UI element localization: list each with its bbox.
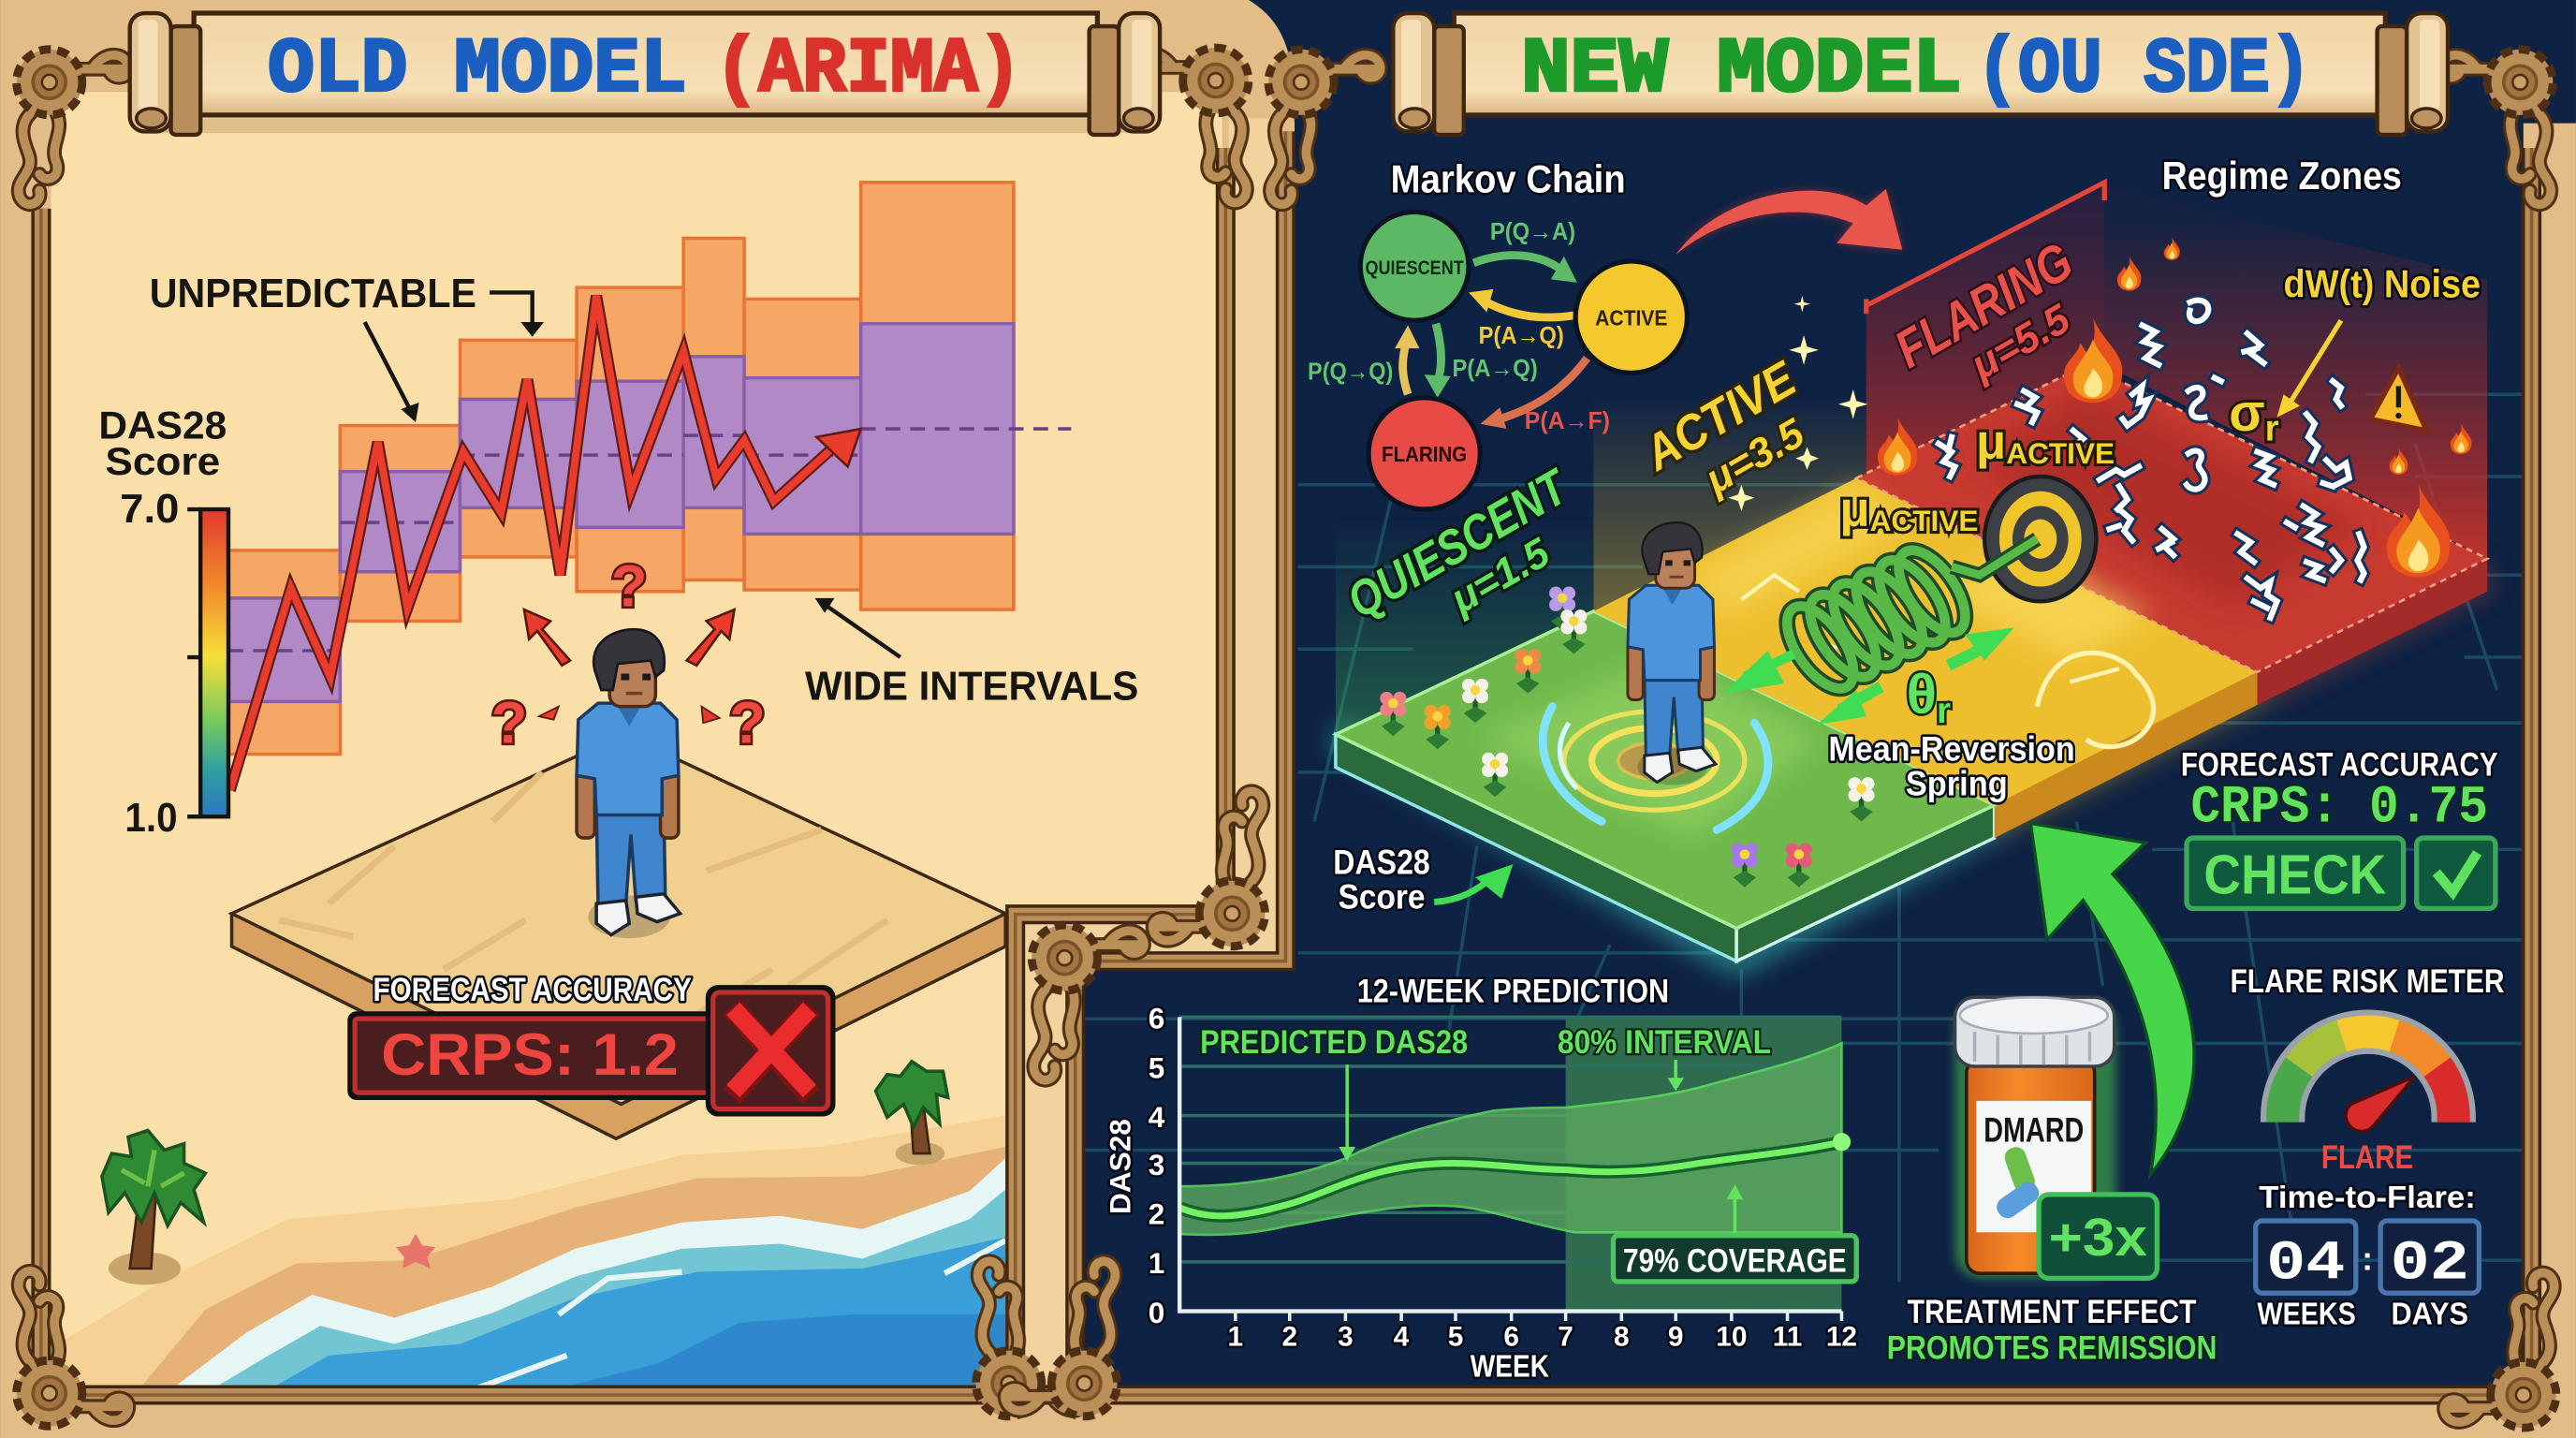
x axis labels	[1228, 1312, 1857, 1352]
label: mean-reversion spring: Spring	[1906, 764, 2008, 802]
callout: 79% coverage: 79% COVERAGE	[1623, 1242, 1847, 1279]
y axis title: DAS28	[1104, 1119, 1137, 1214]
countdown: days	[2380, 1221, 2479, 1332]
target: active mean	[1984, 477, 2096, 601]
title text	[268, 26, 1022, 114]
x axis labels: 9	[1668, 1321, 1683, 1352]
x axis title: WEEK	[1471, 1350, 1549, 1385]
x axis labels: 6	[1503, 1321, 1519, 1352]
board glow	[1336, 575, 2487, 961]
board side faces	[1336, 559, 2487, 961]
isometric regime board	[1336, 183, 2487, 961]
question marks and red arrows: ?	[611, 554, 648, 620]
zone label: flaring: FLARING	[1885, 231, 2083, 379]
colour scale bar: 7.0	[120, 486, 179, 532]
channel between the two frames	[1018, 118, 1281, 1393]
x axis labels: 2	[1281, 1321, 1297, 1352]
y axis labels: 5	[1149, 1050, 1164, 1084]
labels: mu active: ACTIVE	[2006, 436, 2115, 470]
meter heading: FLARE RISK METER	[2231, 963, 2505, 1000]
zone label: flaring	[1885, 231, 2104, 418]
label: time to flare: Time-to-Flare:	[2259, 1181, 2476, 1215]
deep water	[271, 1238, 1005, 1388]
label: predicted DAS28	[1200, 1024, 1468, 1162]
label: DAS28 Score axis: Score	[105, 439, 220, 483]
zone: active	[1593, 478, 2257, 805]
zone glows	[1479, 386, 2365, 838]
CRPS value box: CRPS: 1.2	[381, 1022, 679, 1088]
title text: (OU SDE)	[1976, 26, 2311, 114]
x axis labels: 3	[1338, 1321, 1354, 1352]
x axis labels: 4	[1394, 1321, 1410, 1352]
label: treatment effect: TREATMENT EFFECT	[1908, 1294, 2197, 1330]
zone walls	[1336, 183, 2487, 734]
label: predicted DAS28: PREDICTED DAS28	[1200, 1024, 1468, 1061]
bottle glow	[1955, 1003, 2116, 1278]
diagram: Markov chain	[1308, 156, 1687, 509]
label: sigma r and noise arrow	[2229, 320, 2341, 448]
wet sand bands	[52, 1116, 1005, 1388]
flames	[1878, 237, 2471, 577]
sand platform	[232, 734, 1005, 1138]
perspective grid	[1084, 394, 2524, 1282]
y axis labels	[1149, 1002, 1165, 1329]
forecast shaded region	[1566, 1017, 1841, 1312]
x axis labels: 8	[1614, 1321, 1630, 1352]
banner: new model title	[1393, 13, 2448, 135]
zone label: flaring: μ=5.5	[1962, 296, 2078, 389]
red arrow from chain to regime zones	[1676, 189, 1902, 255]
y axis labels: 0	[1149, 1296, 1164, 1329]
question marks and red arrows: ?	[729, 690, 766, 756]
state: flaring: FLARING	[1382, 442, 1467, 466]
transition labels	[1308, 217, 1610, 434]
x axis labels: 1	[1228, 1321, 1243, 1352]
outer orange interval bars	[228, 183, 1014, 755]
transition labels: P(A→F)	[1525, 406, 1610, 434]
predicted DAS28 line	[1179, 1133, 1851, 1216]
transition labels: P(A→Q)	[1453, 354, 1538, 382]
countdown: weeks	[2256, 1221, 2356, 1332]
label: unpredictable with arrows	[150, 271, 544, 422]
state: flaring	[1368, 398, 1480, 509]
transition labels: P(Q→Q)	[1308, 357, 1393, 385]
callout: CRPS 0.75 forecast accuracy: FORECAST ACCURACY	[2181, 746, 2498, 783]
theta arrows: r	[1937, 691, 1951, 731]
flare risk meter	[2231, 963, 2505, 1332]
x axis labels: 11	[1773, 1321, 1802, 1352]
transition arrows	[1403, 256, 1587, 420]
zone label: quiescent: μ=1.5	[1442, 530, 1558, 623]
zone label: active	[1633, 350, 1830, 523]
dashed median lines	[228, 429, 1071, 651]
label: wide intervals with arrow	[805, 598, 1138, 710]
label: DAS28 Score axis: DAS28	[98, 404, 227, 448]
x axis labels: 7	[1558, 1321, 1573, 1352]
state: quiescent	[1360, 212, 1469, 320]
label: 80% interval: 80% INTERVAL	[1558, 1024, 1771, 1061]
transition labels: P(Q→A)	[1490, 217, 1575, 245]
label: DAS28 score pointer: Score	[1339, 878, 1426, 917]
label: dW(t) noise: dW(t) Noise	[2284, 262, 2481, 306]
callout: 79% coverage	[1613, 1184, 1856, 1282]
bottle cap	[1955, 997, 2115, 1066]
x axis labels: 12	[1826, 1321, 1857, 1352]
countdown: days: DAYS	[2392, 1298, 2468, 1332]
red forecast line	[230, 296, 861, 790]
chart: ARIMA prediction intervals	[228, 183, 1071, 790]
labels: mu active: ACTIVE	[1870, 504, 1978, 537]
title text: (ARIMA)	[714, 26, 1022, 114]
bottle label: DMARD	[1983, 1111, 2084, 1150]
sparkles on active wall	[1728, 296, 1868, 511]
y axis labels: 3	[1149, 1148, 1164, 1181]
gauge needle	[2346, 1077, 2415, 1131]
callout: CRPS 0.75 forecast accuracy: CRPS: 0.75	[2190, 778, 2488, 838]
countdown: weeks: WEEKS	[2257, 1298, 2356, 1332]
chart title: 12-WEEK PREDICTION	[1357, 974, 1669, 1010]
label: DAS28 score pointer: DAS28	[1333, 844, 1430, 882]
labels: mu active: μ	[1976, 415, 2006, 470]
arrow: treatment effect big green	[2030, 823, 2194, 1175]
zone: quiescent	[1336, 611, 1995, 929]
dark panel background	[1084, 0, 2576, 1388]
icon: warning triangle	[2371, 368, 2426, 431]
shallow water	[213, 1190, 1005, 1388]
character: clinician on quiescent zone	[1628, 522, 1716, 785]
zone: flaring	[1856, 365, 2487, 672]
zone label: quiescent: QUIESCENT	[1339, 458, 1579, 629]
zone label: active: ACTIVE	[1633, 350, 1807, 482]
label: DAS28 Score axis	[98, 404, 227, 483]
bottle body	[1967, 1060, 2095, 1273]
label: sigma r and noise arrow: σ	[2229, 383, 2265, 442]
chart: 12-week prediction	[1104, 974, 1857, 1385]
icon: check mark box	[2417, 838, 2496, 909]
banner: old model title	[130, 13, 1160, 135]
icon: starfish	[396, 1234, 435, 1269]
heading: regime zones: Regime Zones	[2162, 154, 2402, 198]
callout: CRPS 0.75 forecast accuracy	[2181, 746, 2498, 909]
state: active: ACTIVE	[1595, 305, 1667, 330]
CRPS value box	[352, 1016, 716, 1096]
badge: +3x: +3x	[2049, 1208, 2147, 1267]
label: promotes remission: PROMOTES REMISSION	[1887, 1329, 2217, 1366]
y axis labels: 6	[1149, 1002, 1164, 1035]
transition arrowheads	[1395, 257, 1577, 429]
character: confused clinician	[577, 629, 681, 938]
theta arrows	[1817, 627, 2014, 731]
label: forecast accuracy: FORECAST ACCURACY	[373, 972, 692, 1008]
colour scale bar	[120, 486, 228, 841]
theta arrows: θ	[1907, 663, 1937, 726]
x axis labels: 10	[1716, 1321, 1747, 1352]
callout: CRPS 1.2 forecast accuracy	[352, 972, 831, 1112]
zone label: active: μ=3.5	[1696, 410, 1812, 504]
y axis labels: 4	[1149, 1100, 1165, 1134]
glowing rings under character	[1543, 707, 1768, 829]
countdown: days: 02	[2391, 1231, 2469, 1295]
bottle label	[1976, 1101, 2091, 1232]
heading: Markov chain: Markov Chain	[1391, 156, 1626, 200]
axes	[1179, 1017, 1841, 1312]
question marks and red arrows	[491, 554, 766, 756]
label: 80% interval	[1558, 1024, 1771, 1091]
grid lines	[1179, 1017, 1841, 1262]
transition labels: P(A→Q)	[1479, 321, 1564, 349]
icon: red X box	[710, 990, 831, 1112]
y axis labels: 2	[1149, 1196, 1164, 1230]
colour scale bar: 1.0	[124, 795, 178, 841]
label: flare: FLARE	[2321, 1139, 2413, 1176]
label: wide intervals with arrow: WIDE INTERVALS	[805, 664, 1138, 710]
title text: NEW MODEL	[1521, 26, 1962, 114]
title text	[1521, 26, 2311, 114]
question marks and red arrows: ?	[491, 690, 527, 756]
check label box: CHECK	[2203, 844, 2386, 906]
gauge arc	[2283, 1032, 2453, 1123]
treatment effect: DMARD bottle	[1887, 997, 2217, 1366]
labels: mu active: μ	[1839, 482, 1870, 537]
countdown: weeks: 04	[2266, 1231, 2345, 1295]
80% interval band	[1179, 1043, 1841, 1235]
flowers on quiescent zone	[1380, 587, 1875, 888]
label: mean-reversion spring	[1828, 730, 2075, 802]
panel background: sand interior	[51, 92, 1222, 1390]
sea foam	[172, 1158, 1005, 1388]
icon: right palm tree	[875, 1062, 948, 1165]
beach scene	[52, 734, 1005, 1388]
mean-reversion spring	[1723, 539, 2037, 699]
inner purple interval bars	[228, 324, 1014, 701]
x axis labels: 5	[1448, 1321, 1463, 1352]
noise particles	[1939, 301, 2364, 618]
label: mean-reversion spring: Mean-Reversion	[1828, 730, 2075, 769]
label: sigma r and noise arrow: r	[2265, 408, 2279, 448]
panel: old model (ARIMA)	[51, 92, 1222, 1390]
icon: left palm tree	[102, 1130, 205, 1284]
state: active	[1575, 261, 1687, 373]
labels: mu active	[1839, 415, 2115, 537]
badge: +3x	[2039, 1195, 2157, 1278]
state: quiescent: QUIESCENT	[1365, 257, 1464, 279]
y axis labels: 1	[1149, 1246, 1164, 1280]
title text: OLD MODEL	[268, 26, 687, 114]
label: unpredictable with arrows: UNPREDICTABLE	[150, 271, 476, 316]
label: DAS28 score pointer	[1333, 844, 1513, 917]
countdown separator: :	[2362, 1241, 2373, 1278]
water shade and wave crests	[559, 1314, 1005, 1388]
